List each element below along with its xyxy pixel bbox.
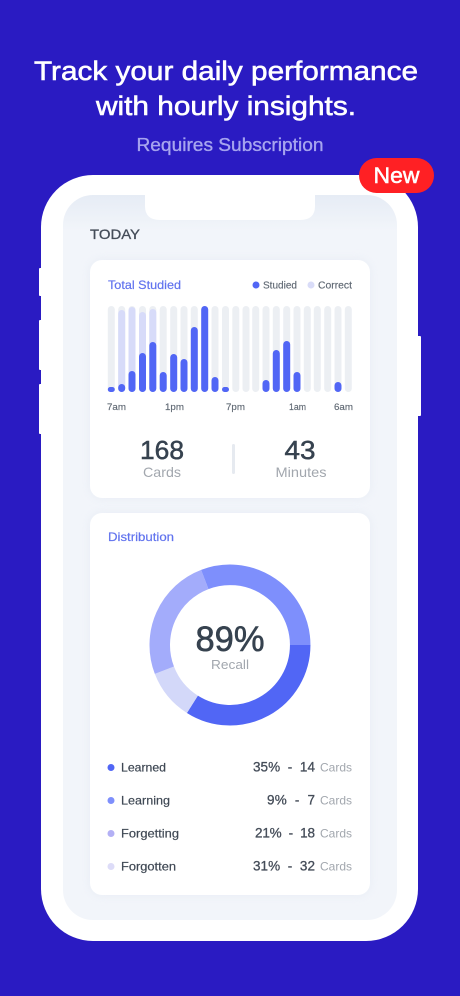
chart axis labels: 7am bbox=[107, 402, 126, 413]
legend: Studied bbox=[263, 280, 297, 292]
stat: minutes: Minutes bbox=[276, 464, 326, 480]
stat: minutes bbox=[276, 435, 326, 480]
stat: minutes: 43 bbox=[284, 435, 316, 465]
legend row: forgotten: Forgotten bbox=[121, 860, 176, 874]
title: Track your daily performance bbox=[34, 56, 418, 86]
legend row: learned: 35% - 14 bbox=[253, 760, 315, 774]
donut value: 89% bbox=[196, 620, 264, 659]
chart axis labels: 1am bbox=[289, 402, 306, 413]
side buttons bbox=[39, 268, 421, 434]
legend row: learned bbox=[108, 760, 352, 774]
phone body bbox=[41, 175, 418, 941]
legend row: forgotten: Cards bbox=[320, 860, 352, 874]
panel: total studied bbox=[90, 260, 370, 498]
stat: cards: 168 bbox=[140, 435, 184, 465]
panel heading: Total Studied bbox=[108, 278, 181, 292]
subtitle: Requires Subscription bbox=[136, 135, 324, 155]
screen bbox=[63, 195, 397, 920]
legend row: forgotten: 31% - 32 bbox=[253, 858, 315, 874]
chart axis labels bbox=[107, 402, 353, 413]
legend row: learned: Learned bbox=[121, 760, 166, 774]
donut chart bbox=[160, 575, 300, 715]
chart axis labels: 6am bbox=[334, 402, 353, 413]
legend row: learning: Cards bbox=[320, 794, 352, 808]
legend row: learning: 9% - 7 bbox=[267, 792, 315, 808]
panel: distribution bbox=[90, 513, 370, 895]
legend row: learning bbox=[108, 792, 352, 808]
title bbox=[34, 56, 418, 121]
legend row: learned: Cards bbox=[320, 760, 352, 774]
legend row: forgetting bbox=[108, 826, 352, 840]
legend row: forgotten bbox=[108, 858, 352, 874]
today heading: TODAY bbox=[90, 226, 141, 242]
title: with hourly insights. bbox=[95, 91, 356, 121]
new badge: New bbox=[374, 163, 420, 188]
legend row: forgetting: Forgetting bbox=[121, 826, 179, 840]
chart axis labels: 7pm bbox=[226, 402, 245, 413]
panel heading: Distribution bbox=[108, 530, 174, 544]
legend: Correct bbox=[318, 280, 352, 292]
legend row: learning: Learning bbox=[121, 794, 170, 808]
chart axis labels: 1pm bbox=[165, 402, 184, 413]
legend row: forgetting: Cards bbox=[320, 826, 352, 840]
legend bbox=[252, 280, 352, 292]
stat: cards: Cards bbox=[143, 464, 181, 480]
bar chart bbox=[108, 306, 352, 392]
stat divider bbox=[232, 444, 235, 474]
notch bbox=[145, 194, 315, 220]
donut caption: Recall bbox=[211, 657, 249, 672]
new badge bbox=[359, 158, 434, 193]
stat: cards bbox=[140, 435, 184, 480]
legend row: forgetting: 21% - 18 bbox=[255, 826, 315, 840]
phone mockup bbox=[39, 175, 421, 941]
